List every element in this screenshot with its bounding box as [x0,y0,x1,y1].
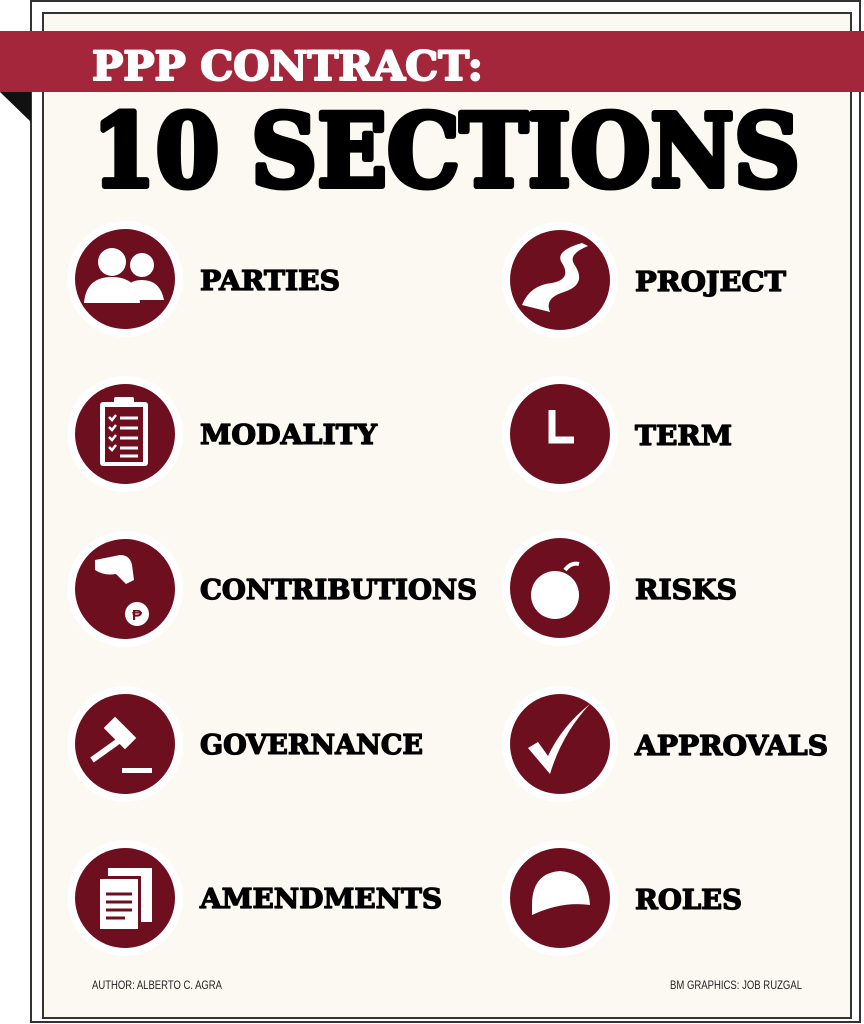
heading: PPP CONTRACT: PPP CONTRACT: [92,43,483,90]
item: project: PROJECT [635,267,786,298]
icon: check [528,704,590,774]
banner fold triangle [0,92,31,122]
item: term: TERM [635,421,732,452]
banner [0,31,864,122]
icon: clipboard [100,397,148,466]
item: risks: RISKS [635,575,737,606]
item: governance [67,686,423,802]
item: parties [67,221,340,337]
item: approvals: APPROVALS [634,731,828,762]
item: amendments [67,840,442,956]
item: governance: GOVERNANCE [200,730,423,761]
icon: bomb [531,564,579,619]
icon: hand with coin: ₱ [132,607,142,624]
item: amendments: AMENDMENTS [199,884,442,915]
item: contributions [67,531,477,647]
item: approvals [502,686,828,802]
icon: hard hat [532,871,590,915]
item: modality: MODALITY [200,420,378,451]
icon: people [84,248,164,303]
item: risks [502,530,737,646]
icon: documents [97,868,152,932]
title: 10 SECTIONS: 10 SECTIONS [92,92,800,210]
footer: author: AUTHOR: ALBERTO C. AGRA [92,978,222,992]
icon: clock hands [552,410,574,440]
item: parties: PARTIES [200,266,340,297]
icon: gavel [92,717,152,773]
item: roles [502,840,742,956]
icon: road [522,243,588,312]
item: roles: ROLES [635,885,742,916]
item: term [502,376,732,492]
item: modality [67,376,378,492]
footer: graphics credit: BM GRAPHICS: JOB RUZGAL [670,978,802,992]
icon: hand with coin [95,555,149,626]
item: contributions: CONTRIBUTIONS [200,575,477,606]
item: project [502,222,786,338]
